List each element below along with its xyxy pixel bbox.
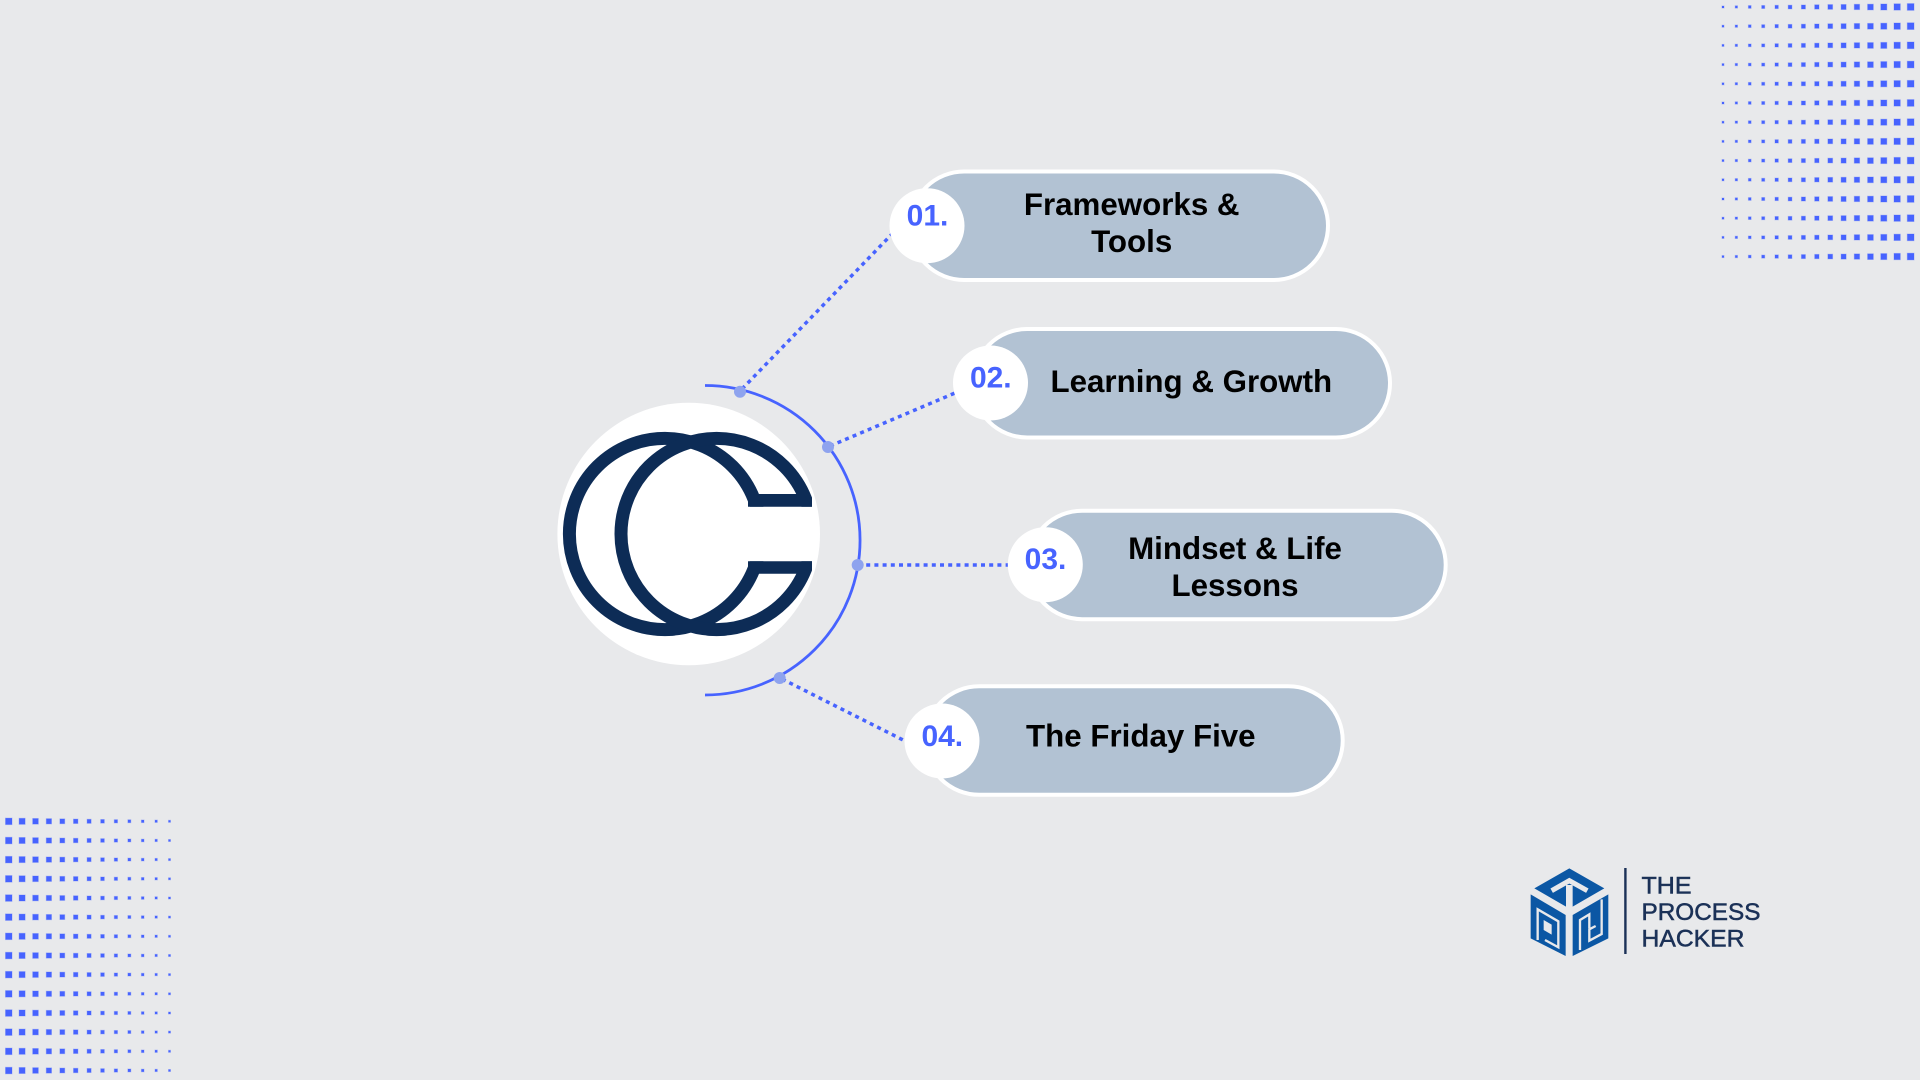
item 04: The Friday Five: 04. [921,720,963,753]
wordmark: HACKER [1642,926,1744,953]
connector node 03 [852,559,864,571]
connector line 02 [830,393,955,446]
connector node 01 [734,386,746,398]
item 03: Mindset & Life Lessons [1008,511,1446,619]
connector line 03 [858,563,1008,567]
dot grid: bottom left [6,818,170,1074]
connector arc [705,386,860,695]
connector node 04 [774,672,786,684]
item 02: Learning & Growth [953,329,1390,438]
connector line 01 [742,233,893,389]
item 04: The Friday Five: The Friday Five [1026,719,1256,754]
item 04: The Friday Five [904,686,1343,795]
divider [1624,868,1627,954]
wordmark: THE [1642,872,1692,899]
item 03: Mindset & Life Lessons: 03. [1025,543,1066,576]
wordmark: PROCESS [1642,899,1760,926]
item 01: Frameworks & Tools: Frameworks & [1024,187,1240,222]
wordmark [1642,872,1760,953]
connector line 04 [782,679,905,741]
icon: cube [1531,868,1608,956]
item 01: Frameworks & Tools: 01. [907,200,948,233]
dot grid: top right [1722,4,1914,260]
item 03: Mindset & Life Lessons: Lessons [1172,568,1298,603]
connector node 02 [822,441,834,453]
item 01: Frameworks & Tools: Tools [1091,224,1172,259]
brand logo: The Process Hacker [1531,868,1760,956]
item 02: Learning & Growth: 02. [970,362,1012,394]
central logo badge [557,403,820,665]
item 01: Frameworks & Tools [890,172,1328,280]
item 03: Mindset & Life Lessons: Mindset & Life [1128,531,1342,566]
item 02: Learning & Growth: Learning & Growth [1050,364,1332,399]
